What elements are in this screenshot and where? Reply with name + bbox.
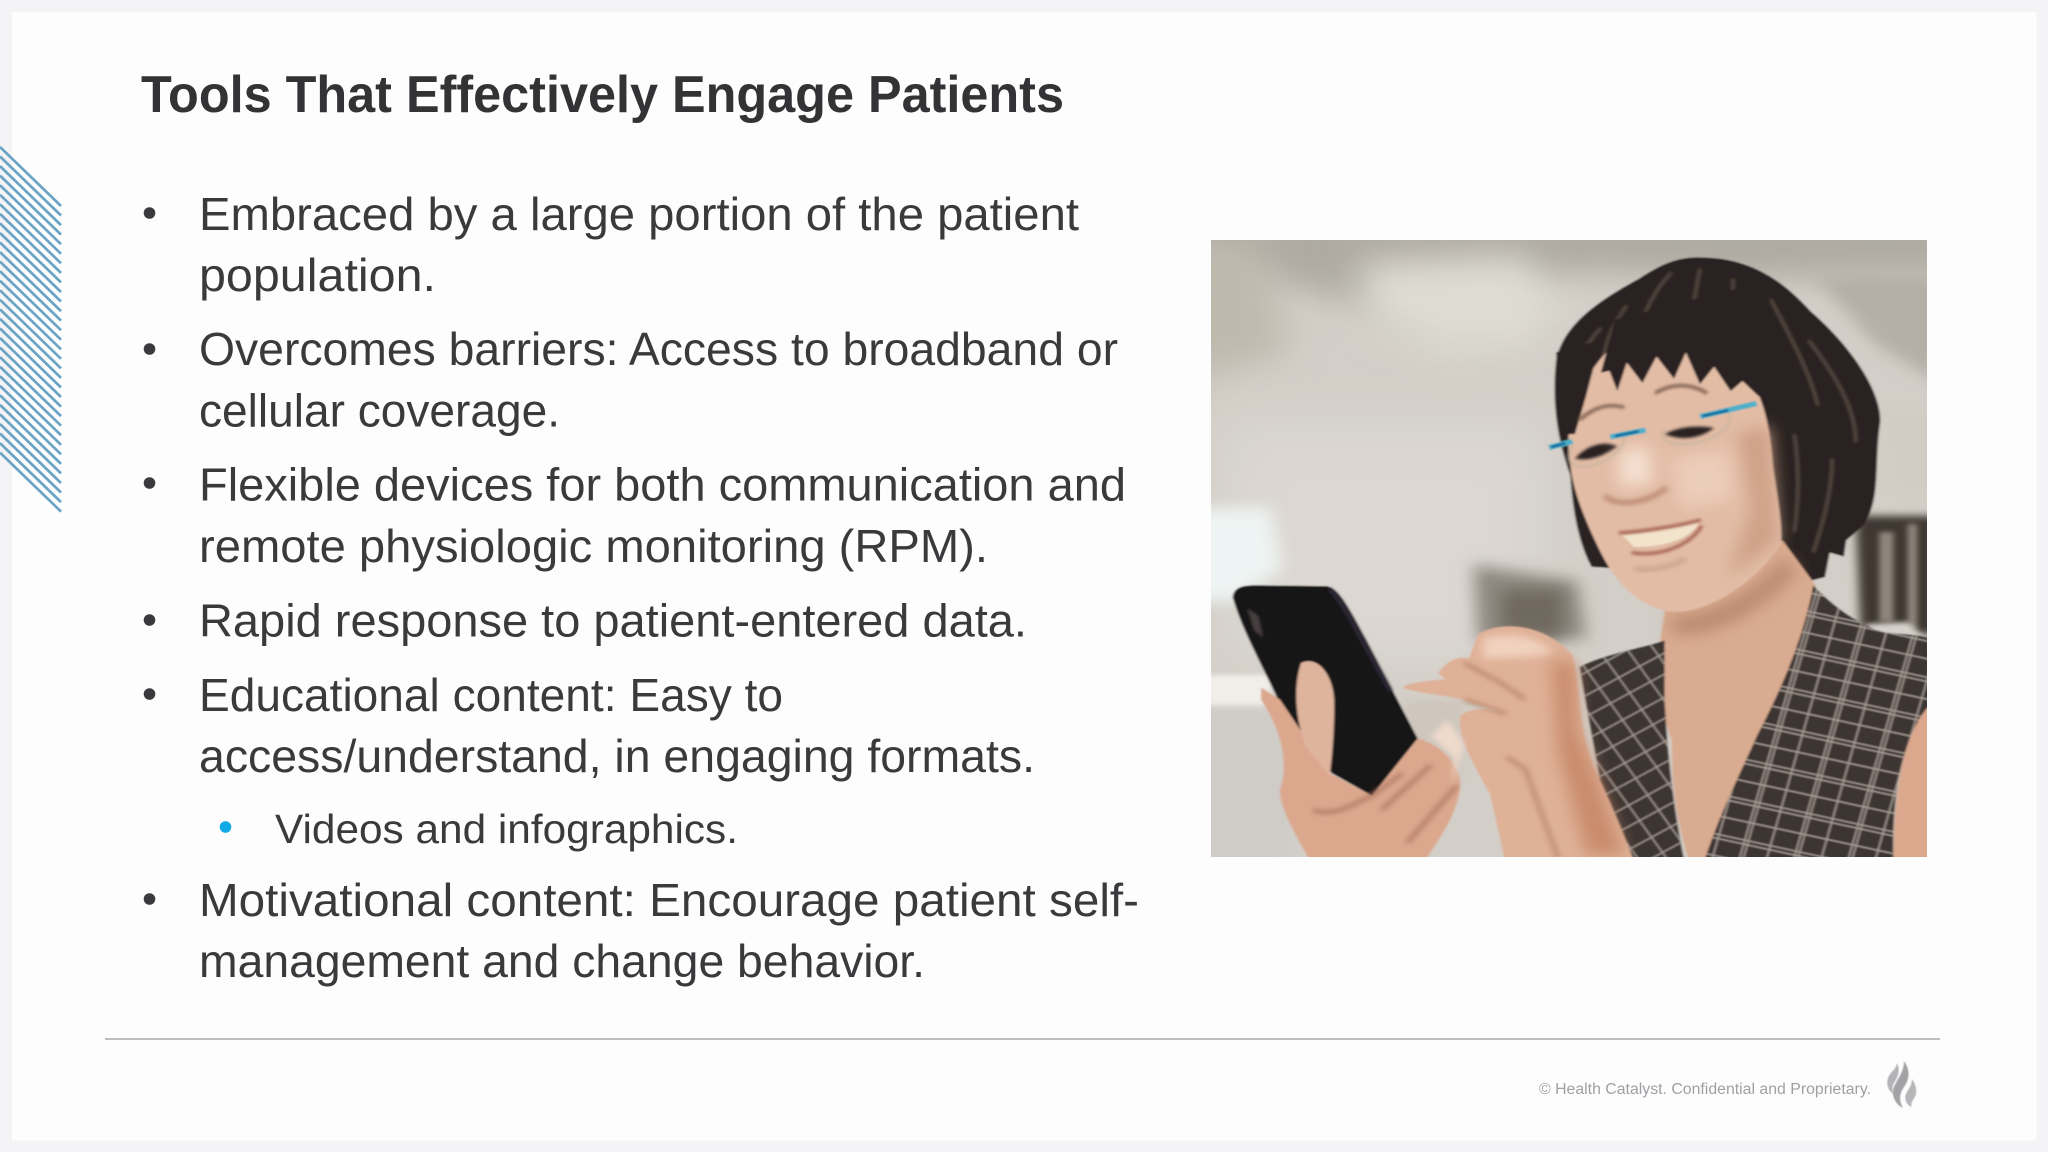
nose <box>1605 487 1667 503</box>
room background <box>1152 189 2002 924</box>
pointing hand and forearm <box>1403 626 1636 867</box>
decorative diagonal stripes <box>0 147 61 512</box>
bullet: motivational content: management and change behavior. <box>199 935 925 987</box>
sub-bullet: videos and infographics: Videos and infographics. <box>275 806 738 852</box>
bullet: motivational content <box>144 874 1139 987</box>
bullet: rapid response: Rapid response to patient-entered data. <box>199 594 1027 646</box>
footer copyright text: © Health Catalyst. Confidential and Proprietary. <box>1539 1081 1871 1098</box>
bullet: educational content: Educational content: Easy to <box>199 669 783 721</box>
bullet: flexible devices: Flexible devices for both communication and <box>199 458 1126 510</box>
bullet: embraced <box>144 188 1079 301</box>
bullet: motivational content: Motivational content: Encourage patient self- <box>199 874 1139 926</box>
shirt <box>1580 585 1955 867</box>
smartphone <box>1233 585 1418 796</box>
photo: woman smiling at smartphone <box>1211 240 1927 857</box>
glasses <box>1549 403 1757 467</box>
icon: Health Catalyst flame logo <box>1887 1061 1916 1108</box>
bullet: overcomes barriers: Overcomes barriers: Access to broadband or <box>199 323 1118 375</box>
bare arm <box>1893 708 1955 867</box>
face <box>1549 287 1781 612</box>
hair <box>1555 257 1880 581</box>
bullet: embraced: Embraced by a large portion of the patient <box>199 188 1079 240</box>
bullet: flexible devices: remote physiologic monitoring (RPM). <box>199 520 988 572</box>
neck and chest <box>1657 540 1816 867</box>
holding hand <box>1261 661 1464 867</box>
bullet: educational content: access/understand, in engaging formats. <box>199 730 1035 782</box>
title: Tools That Effectively Engage Patients <box>141 66 1064 124</box>
bullet list <box>144 188 1139 987</box>
footer divider <box>105 1038 1940 1040</box>
bullet: overcomes barriers: cellular coverage. <box>199 384 560 436</box>
bullet: embraced: population. <box>199 249 436 301</box>
bullet: overcomes barriers <box>144 323 1118 436</box>
eyebrows <box>1580 386 1707 420</box>
bangs <box>1601 287 1773 405</box>
eyes <box>1575 426 1714 459</box>
neck shadow <box>1672 557 1797 635</box>
bullet: flexible devices <box>144 458 1126 572</box>
bullet: educational content <box>144 669 1035 782</box>
smile <box>1622 522 1699 547</box>
